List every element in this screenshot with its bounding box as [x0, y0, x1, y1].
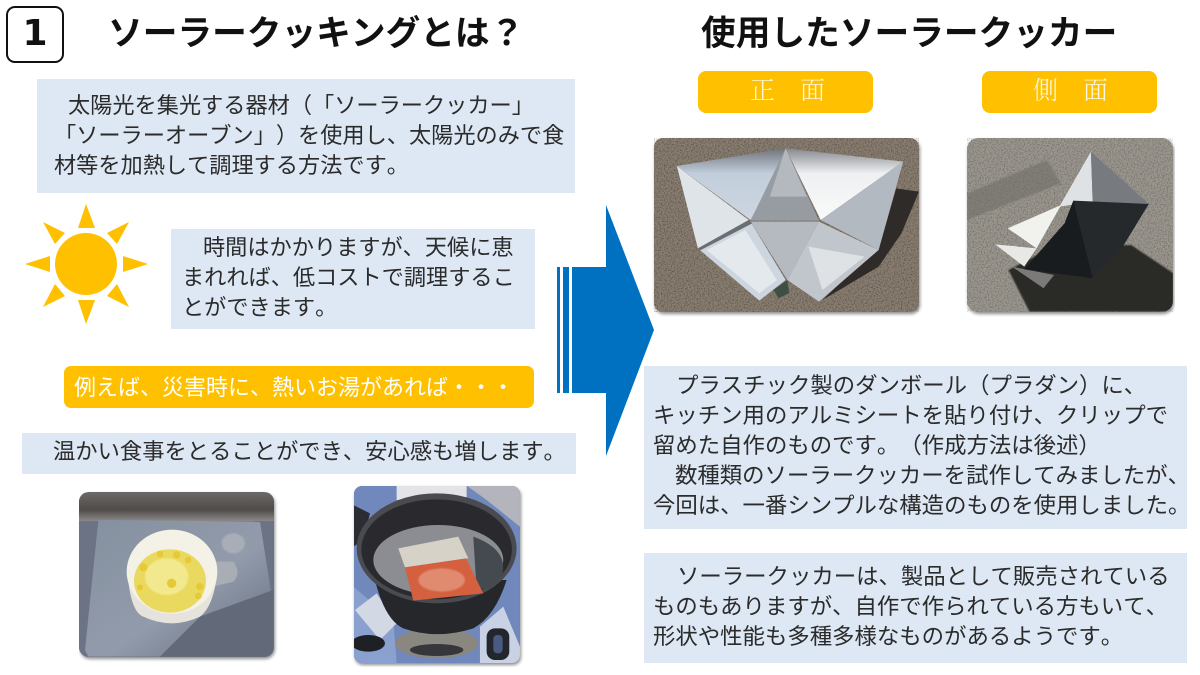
text block: warm meal — [22, 433, 576, 474]
label: side view — [982, 71, 1157, 113]
text block: homemade cooker description: 数種類のソーラークッカーを試作してみましたが、 — [675, 463, 1190, 488]
label: front view — [698, 71, 873, 113]
label: side view: 面 — [1083, 78, 1108, 105]
callout: for example in a disaster: 例えば、災害時に、熱いお湯があれば・・・ — [74, 375, 514, 400]
section number badge: 1 — [22, 13, 48, 54]
callout: for example in a disaster — [64, 366, 534, 408]
title: solar cooker used: 使用したソーラークッカー — [701, 15, 1117, 53]
text block: warm meal: 温かい食事をとることができ、安心感も増します。 — [53, 439, 566, 464]
photo: solar cooker side — [966, 138, 1175, 316]
text block: definition of solar cooking — [37, 79, 575, 193]
text block: homemade cooker description: 今回は、一番シンプルな構造のものを使用しました。 — [653, 493, 1190, 518]
section number badge — [6, 6, 64, 63]
text block: commercial and homemade cookers: ソーラークッカーは、製品として販売されている — [677, 564, 1170, 589]
title: what is solar cooking: ソーラークッキングとは？ — [108, 15, 524, 53]
text block: definition of solar cooking: 太陽光を集光する器材（「ソーラークッカー」 — [68, 93, 534, 118]
text block: commercial and homemade cookers: ものもありますが、自作で作られている方もいて、 — [653, 594, 1168, 619]
arrow: to the right — [557, 205, 654, 456]
text block: time and low cost: まれれば、低コストで調理するこ — [182, 265, 515, 290]
text block: definition of solar cooking: 「ソーラーオーブン」）を使用し、太陽光のみで食 — [54, 123, 564, 148]
text block: homemade cooker description — [644, 366, 1187, 529]
text block: time and low cost: 時間はかかりますが、天候に恵 — [203, 235, 514, 260]
text block: homemade cooker description: キッチン用のアルミシートを貼り付け、クリップで — [653, 403, 1168, 428]
label: side view: 側 — [1033, 78, 1058, 105]
text block: definition of solar cooking: 材等を加熱して調理する方法です。 — [54, 153, 409, 178]
label: front view: 面 — [800, 78, 825, 105]
photo: retort pouch in a pot — [352, 486, 524, 667]
photo: solar cooker front — [652, 138, 922, 316]
text block: homemade cooker description: 留めた自作のものです。（作成方法は後述） — [653, 433, 1101, 458]
label: front view: 正 — [750, 78, 775, 105]
text block: homemade cooker description: プラスチック製のダンボール（プラダン）に、 — [676, 373, 1146, 398]
photo: mug of corn soup — [79, 492, 278, 662]
icon: sun — [25, 204, 148, 324]
text block: commercial and homemade cookers — [644, 553, 1187, 663]
text block: commercial and homemade cookers: 形状や性能も多種多様なものがあるようです。 — [653, 624, 1123, 649]
text block: time and low cost — [171, 229, 535, 329]
text block: time and low cost: とができます。 — [182, 295, 337, 320]
